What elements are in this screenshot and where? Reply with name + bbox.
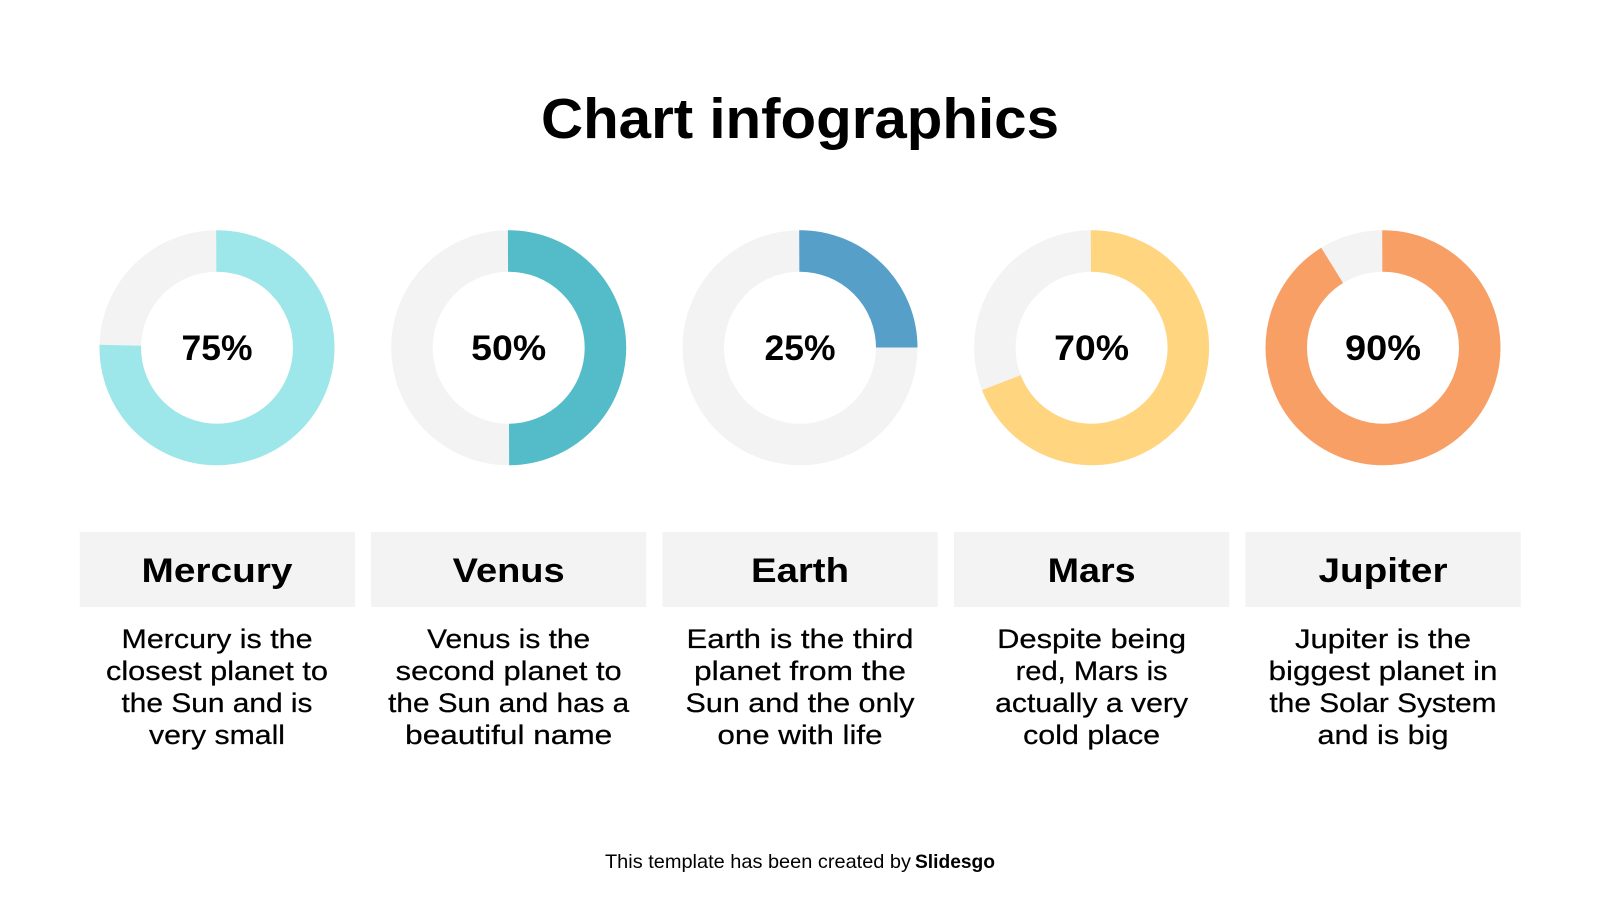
description: Mars: red, Mars is <box>1016 656 1168 686</box>
donut chart: Earth 25%: 25% <box>764 329 836 368</box>
label box: Mars: Mars <box>1048 552 1136 590</box>
panel: Jupiter <box>1245 251 1521 750</box>
description: Jupiter <box>1268 624 1498 750</box>
panel: Venus <box>371 251 646 750</box>
description: Mars: cold place <box>1023 720 1160 750</box>
donut chart: Venus 50%: 50% <box>471 329 546 368</box>
label box: Mars <box>954 532 1229 607</box>
panel: Mars <box>954 251 1229 750</box>
description: Mercury: very small <box>149 720 285 750</box>
description: Venus: second planet to <box>396 656 622 686</box>
donut chart: Mars 70%: 70% <box>1054 329 1129 368</box>
description: Earth: Earth is the third <box>686 624 914 654</box>
label box: Earth <box>662 532 938 607</box>
description: Mercury: closest planet to <box>106 656 328 686</box>
donut chart: Jupiter 90% <box>1286 251 1480 444</box>
description: Jupiter: and is big <box>1318 720 1448 750</box>
description: Venus: beautiful name <box>405 720 612 750</box>
description: Mars: actually a very <box>995 688 1189 718</box>
description: Venus: Venus is the <box>427 624 590 654</box>
description: Jupiter: biggest planet in <box>1268 656 1498 686</box>
label box: Venus <box>371 532 646 607</box>
description: Mercury <box>106 624 328 750</box>
description: Earth: one with life <box>718 720 882 750</box>
label box: Jupiter: Jupiter <box>1318 552 1448 590</box>
description: Earth: planet from the <box>694 656 906 686</box>
description: Venus <box>388 624 629 750</box>
description: Mercury: Mercury is the <box>122 624 312 654</box>
description: Jupiter: Jupiter is the <box>1295 624 1471 654</box>
description: Earth <box>686 624 915 750</box>
donut chart: Jupiter 90%: 90% <box>1345 329 1421 368</box>
description: Jupiter: the Solar System <box>1270 688 1496 718</box>
title: Chart infographics <box>541 87 1059 151</box>
label box: Earth: Earth <box>751 552 849 590</box>
label box: Venus: Venus <box>453 552 565 590</box>
donut chart: Mercury 75%: 75% <box>182 329 252 368</box>
panel: Earth <box>662 251 938 750</box>
donut chart: Mercury 75% <box>120 251 314 444</box>
donut chart: Venus 50% <box>412 251 605 444</box>
description: Mercury: the Sun and is <box>122 688 312 718</box>
label box: Mercury <box>80 532 355 607</box>
description: Earth: Sun and the only <box>686 688 915 718</box>
label box: Mercury: Mercury <box>142 552 293 590</box>
description: Mars: Despite being <box>997 624 1186 654</box>
panel: Mercury <box>80 251 355 750</box>
donut chart: Mars 70% <box>995 251 1188 444</box>
description: Mars <box>995 624 1189 750</box>
donut chart: Earth 25% <box>703 251 897 444</box>
label box: Jupiter <box>1245 532 1521 607</box>
footer credit: This template has been created by <box>605 851 911 873</box>
description: Venus: the Sun and has a <box>388 688 629 718</box>
footer credit: Slidesgo <box>915 851 995 873</box>
